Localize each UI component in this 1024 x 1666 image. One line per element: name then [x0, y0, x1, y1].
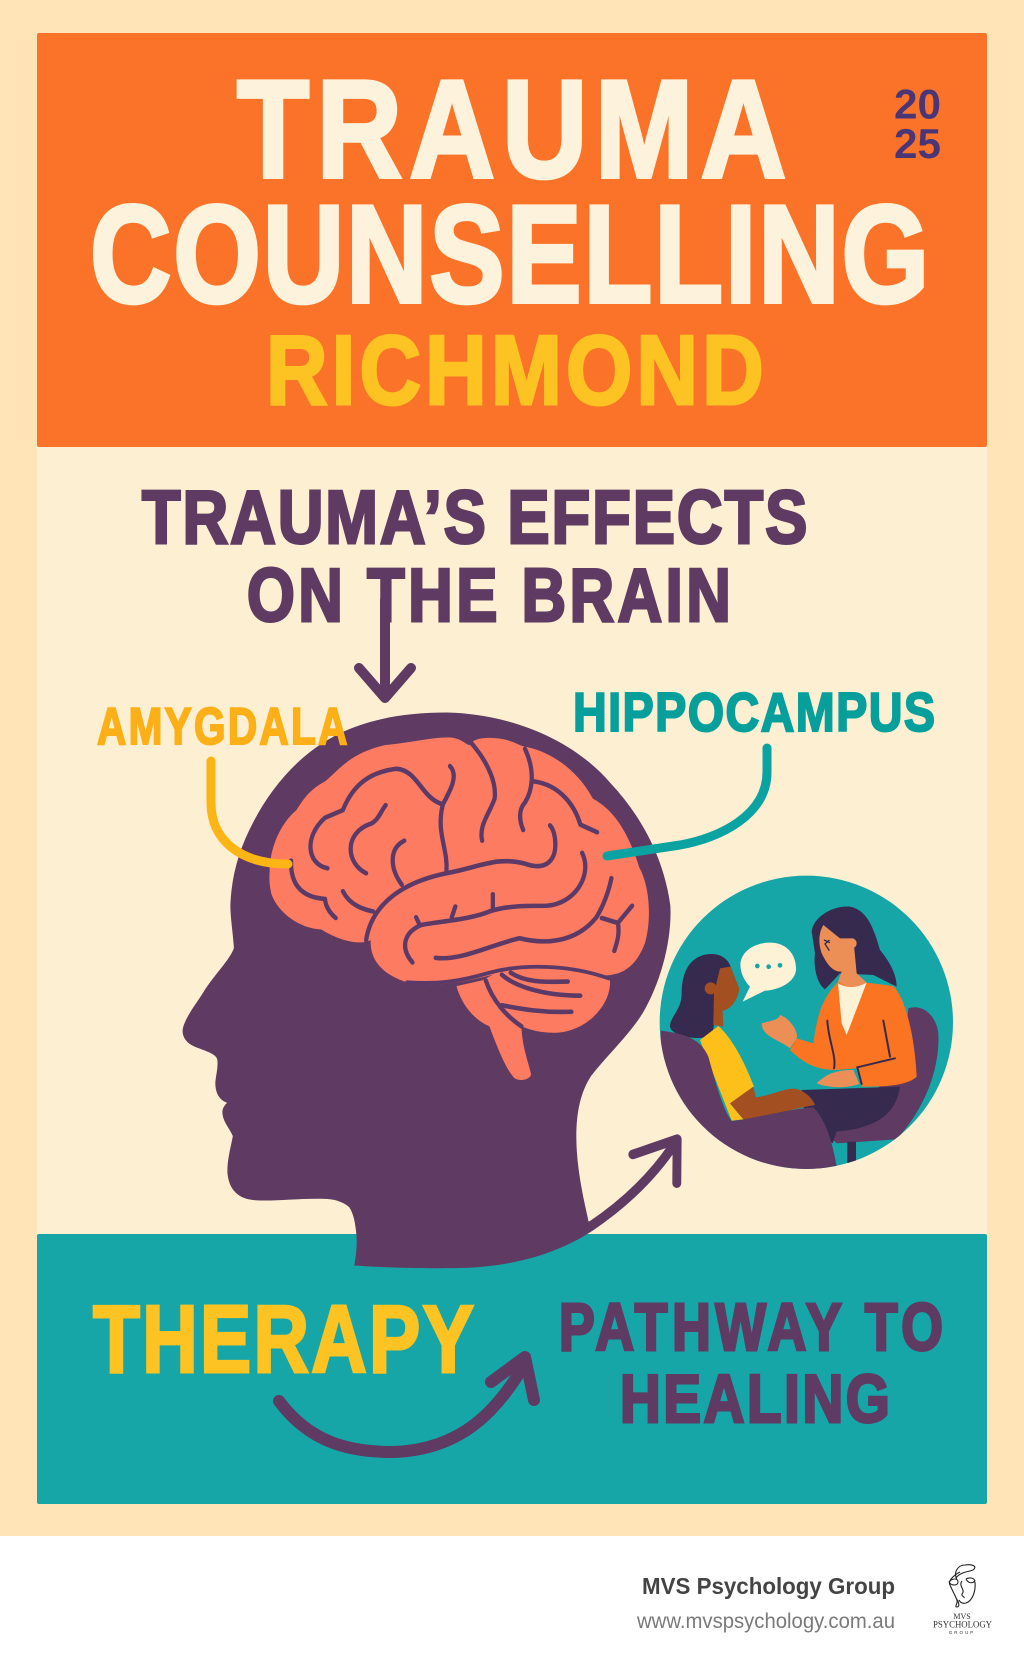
footer — [0, 1536, 1024, 1666]
client chair — [660, 1031, 837, 1173]
counselling session circle — [660, 876, 953, 1173]
amygdala label: AMYGDALA — [97, 697, 347, 755]
pathway to healing text: PATHWAY TO — [559, 1289, 943, 1364]
panel: central cream area — [37, 440, 987, 1240]
client hair — [670, 954, 731, 1038]
therapist cardigan — [790, 982, 917, 1087]
client arm — [730, 1087, 815, 1119]
arrow: head to therapy — [589, 1139, 677, 1227]
year label: 25 — [894, 120, 941, 167]
therapist top — [838, 983, 867, 1035]
therapist legs — [802, 1087, 900, 1143]
client face — [705, 967, 739, 1027]
teal backdrop — [660, 876, 953, 1169]
hippocampus pointer — [607, 748, 767, 856]
arrow: heading to brain — [359, 600, 411, 698]
logo wordmark — [933, 1612, 992, 1635]
title: trauma: TRAUMA — [237, 52, 786, 207]
logo face line art — [949, 1565, 975, 1607]
pathway to healing text — [559, 1289, 943, 1437]
brain folds — [291, 743, 632, 1026]
therapist hair — [812, 907, 897, 989]
website: www.mvspsychology.com.au — [636, 1610, 895, 1633]
year label: 20 — [894, 80, 941, 128]
head silhouette — [183, 713, 671, 1268]
therapist chair — [830, 1007, 938, 1143]
hippocampus label: HIPPOCAMPUS — [573, 681, 935, 743]
year label — [894, 80, 941, 167]
panel: orange title banner — [37, 33, 987, 447]
logo wordmark: MVS — [953, 1612, 971, 1621]
title: counselling: COUNSELLING — [90, 177, 929, 332]
brain cerebrum — [269, 737, 649, 985]
amygdala pointer — [211, 761, 288, 864]
company name: MVS Psychology Group — [642, 1573, 895, 1599]
section heading: TRAUMA’S EFFECTS — [142, 475, 807, 559]
therapist raised hand — [762, 1015, 797, 1048]
therapist eye — [824, 940, 830, 951]
speech bubble — [740, 943, 796, 1002]
logo wordmark: PSYCHOLOGY — [933, 1620, 992, 1630]
section heading: ON THE BRAIN — [247, 553, 731, 637]
section heading — [142, 475, 807, 637]
brain cerebellum and stem — [456, 965, 610, 1080]
therapy label: THERAPY — [93, 1286, 474, 1393]
panel: teal therapy banner — [37, 1234, 987, 1504]
pathway to healing text: HEALING — [620, 1361, 890, 1437]
therapist face — [819, 925, 867, 987]
logo — [933, 1565, 992, 1635]
client shirt — [700, 1026, 754, 1121]
head and brain illustration — [183, 713, 677, 1268]
arrow: therapy to healing — [279, 1357, 534, 1452]
logo wordmark: GROUP — [949, 1630, 975, 1635]
therapist lower hand — [817, 1070, 859, 1087]
cardigan seams — [827, 1021, 895, 1084]
chair stem — [847, 1142, 856, 1165]
title: richmond: RICHMOND — [266, 317, 764, 425]
